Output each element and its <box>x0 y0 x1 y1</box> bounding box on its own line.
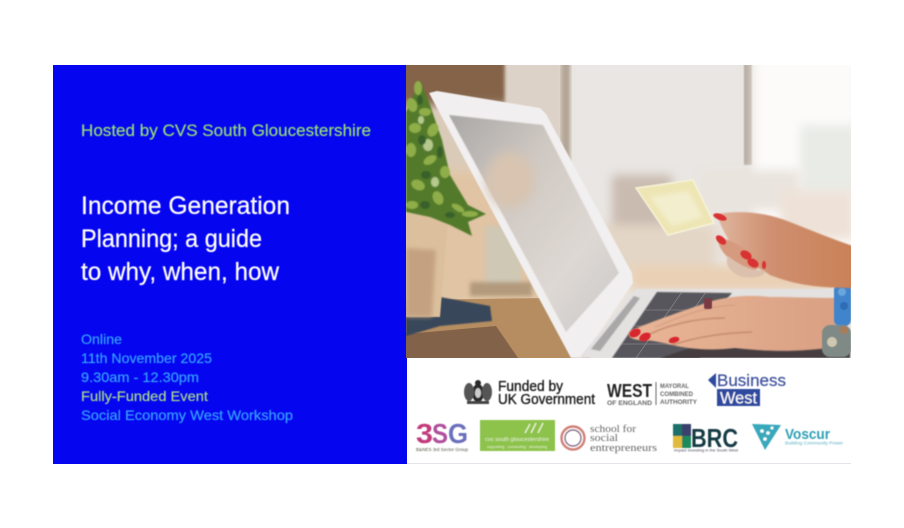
logo: Business West: Business <box>717 371 786 390</box>
title: to why, when, how <box>81 258 280 286</box>
logo: UK Government <box>464 379 595 408</box>
panel: event details <box>53 65 407 464</box>
logo: School for Social Entrepreneurs: school for <box>590 423 636 435</box>
logo: UK Government: Funded by <box>498 379 564 395</box>
event details list: 9.30am - 12.30pm <box>81 369 199 385</box>
plant leaves <box>405 80 486 236</box>
logo: West of England Mayoral Combined Authority: AUTHORITY <box>660 399 698 406</box>
lower hand <box>629 296 836 351</box>
title: Income Generation <box>81 192 290 220</box>
wooden table <box>406 298 590 358</box>
logo: BRC: BRC <box>691 423 738 453</box>
logo: Business West <box>708 371 786 408</box>
plant pot <box>406 213 442 318</box>
logo: West of England Mayoral Combined Authority: MAYORAL <box>660 383 689 390</box>
logo: Business West: West <box>720 388 757 408</box>
upper hand holding card <box>716 212 853 288</box>
logo: UK Government: UK Government <box>498 392 595 408</box>
logo: BRC: Impact Investing in the South West <box>674 448 739 452</box>
logo: 3SG: G <box>448 418 468 449</box>
event details list: 11th November 2025 <box>81 350 212 366</box>
laptop base <box>579 289 853 358</box>
logo: Voscur <box>752 424 844 450</box>
credit card <box>636 180 714 235</box>
icon: royal crest <box>464 380 492 404</box>
laptop screen <box>449 115 619 332</box>
logo: Voscur: Voscur <box>785 427 830 443</box>
blurred room background <box>400 55 860 305</box>
logo: 3SG <box>416 418 468 453</box>
logo: School for Social Entrepreneurs: entrepreneurs <box>590 442 657 454</box>
event details list: Fully-Funded Event <box>81 388 208 404</box>
logo: CVS South Gloucestershire: supporting · connecting · developing <box>487 445 547 449</box>
photo: hands using a laptop with a payment card <box>400 55 860 358</box>
logo: West of England Mayoral Combined Authority <box>607 381 698 407</box>
red nails upper hand <box>712 212 766 269</box>
logo: West of England Mayoral Combined Authority: OF ENGLAND <box>607 400 652 407</box>
logo: West of England Mayoral Combined Authority: WEST <box>607 381 652 401</box>
keyboard <box>612 292 732 358</box>
logo: BRC <box>673 423 739 453</box>
logo: Voscur: Building Community Power <box>785 440 844 446</box>
host line: Hosted by CVS South Gloucestershire <box>81 122 371 140</box>
event details list <box>81 331 293 423</box>
event details list: Online <box>81 331 122 347</box>
logo: West of England Mayoral Combined Authority: COMBINED <box>660 391 693 398</box>
logo: School for Social Entrepreneurs <box>562 423 657 454</box>
logo: 3SG: S <box>432 418 448 449</box>
logo: CVS South Gloucestershire <box>480 420 555 451</box>
logo: School for Social Entrepreneurs: social <box>590 432 618 444</box>
logo: 3SG: 3 <box>416 418 433 449</box>
logo: CVS South Gloucestershire: cvs south gloucestershire <box>485 437 549 443</box>
title <box>81 192 290 286</box>
event details list: Social Economy West Workshop <box>81 407 293 423</box>
laptop lid <box>429 91 633 358</box>
dark place mat <box>406 297 492 336</box>
panel: sponsor logos <box>407 358 851 464</box>
logo: 3SG: B&NES 3rd Sector Group <box>416 447 468 453</box>
ring <box>704 298 712 309</box>
red nails lower hand <box>628 327 680 344</box>
cup on table <box>470 226 532 296</box>
bracelets <box>822 284 851 357</box>
title: Planning; a guide <box>81 225 262 253</box>
